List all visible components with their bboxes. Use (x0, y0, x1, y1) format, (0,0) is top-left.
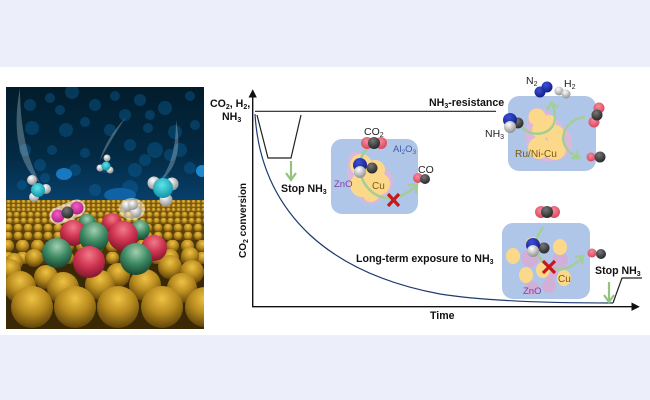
short exposure dip line (257, 115, 301, 158)
gas NH3 molecule left (27, 175, 51, 202)
label: reactant feed: , H (230, 98, 243, 110)
gold surface (6, 200, 204, 329)
labels: N (526, 75, 534, 87)
x axis label: Time (430, 310, 455, 322)
label: reactant feed: 2 (243, 104, 247, 111)
panel: catalyst surface illustration (6, 87, 204, 329)
labels: Cu (372, 181, 385, 192)
cluster of red and green spheres (42, 213, 167, 278)
bokeh sky (6, 85, 208, 202)
label: reactant feed: NH (222, 111, 237, 123)
labels: ZnO (334, 179, 352, 190)
panel: long-term poisoned catalyst (502, 206, 606, 299)
labels: H (564, 78, 572, 90)
CO molecule (588, 248, 606, 259)
label: long-term exposure: 3 (490, 259, 494, 266)
NH3-resistant catalyst line (255, 110, 496, 112)
label: stop NH3 left: 3 (323, 189, 327, 196)
labels (523, 274, 571, 297)
label: reactant feed: CO (210, 98, 226, 110)
adsorbed CO2 (52, 202, 84, 222)
CO2 molecule (361, 137, 387, 149)
decay curve (255, 114, 613, 303)
labels: Cu (558, 274, 571, 285)
motion trails (17, 88, 178, 183)
labels: Al (393, 144, 401, 155)
labels: ZnO (523, 286, 541, 297)
red cross (543, 261, 555, 273)
labels: 3 (500, 134, 504, 141)
arrow: stop NH3 right (604, 282, 614, 302)
label: reactant feed: 2 (226, 104, 230, 111)
label: reactant feed: , (247, 98, 250, 110)
labels: 3 (412, 149, 416, 156)
CO molecule (413, 173, 430, 184)
labels: O (405, 144, 412, 155)
labels (334, 126, 434, 192)
labels (485, 75, 576, 160)
ZnO particles (521, 249, 568, 295)
label: stop NH3 left: Stop NH (281, 183, 323, 195)
red cross (388, 194, 399, 206)
arrow: stop NH3 left (286, 161, 296, 180)
panel: poisoned Cu/ZnO/Al2O3 (331, 126, 434, 214)
ZnO and Cu particle (347, 152, 393, 204)
label: reactant feed (210, 98, 250, 124)
label: long-term exposure: Long-term exposure to NH (356, 253, 490, 265)
x axis (252, 306, 637, 308)
labels: 2 (401, 149, 405, 156)
H2 molecule (554, 86, 570, 98)
labels: 2 (572, 84, 576, 91)
CO2 molecule (588, 102, 604, 128)
label: stop NH3 right: 3 (637, 271, 641, 278)
label: NH3-resistance: NH (429, 97, 444, 109)
label: NH3-resistance: -resistance (448, 97, 504, 109)
y axis (252, 92, 254, 306)
reaction path arrow (536, 227, 583, 269)
labels: CO (418, 164, 434, 176)
labels: Ru/Ni-Cu (515, 149, 557, 160)
labels: 2 (534, 81, 538, 88)
NH3 molecule (526, 238, 550, 257)
CO2 molecule (535, 206, 560, 218)
label: stop NH3 right: Stop NH (595, 265, 637, 277)
label: reactant feed: 3 (237, 117, 241, 124)
arrow: CO2 conversion (563, 117, 585, 158)
chart: CO2 conversion over time (238, 92, 642, 322)
labels: 2 (380, 132, 384, 139)
labels: NH (485, 128, 500, 140)
arrow: NH3 decomposition (522, 103, 558, 134)
reaction path arrow (360, 148, 417, 198)
y axis label: conversion (238, 183, 249, 239)
y axis label: 2 (243, 239, 250, 243)
NH3 molecule (353, 158, 378, 178)
labels: CO (364, 126, 380, 138)
y axis label: CO (238, 243, 249, 258)
gas NH3 molecule centre (96, 154, 114, 174)
NH3 molecule (503, 113, 524, 133)
N2 molecule (534, 82, 552, 98)
recovery line (613, 278, 642, 303)
panel: NH3-resistant Ru/Ni-Cu (485, 75, 606, 171)
label: NH3-resistance: 3 (444, 103, 448, 110)
Cu particles (506, 237, 571, 286)
CO molecule (586, 152, 606, 162)
Ru/Ni-Cu particle (526, 108, 572, 161)
background bottom band (0, 335, 650, 400)
adsorbed NH3 (119, 198, 145, 220)
gas NH3 molecule right (148, 176, 178, 206)
background top band (0, 0, 650, 67)
